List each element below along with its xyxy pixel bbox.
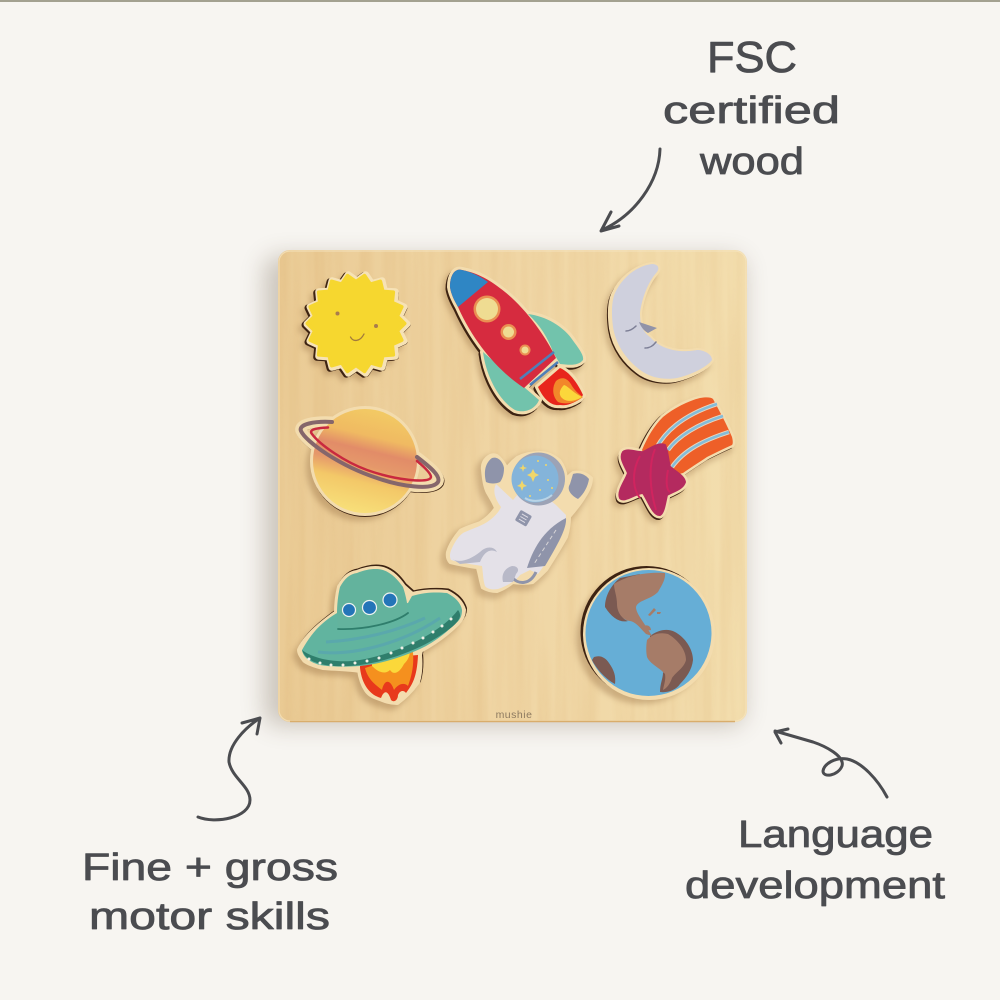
piece: shooting star (615, 397, 733, 520)
top border strip (0, 0, 1000, 2)
backpack stitching (534, 530, 556, 564)
label text: certified (663, 90, 840, 132)
rim lights (308, 618, 452, 666)
astronaut knee shading (451, 548, 518, 582)
piece: ringed planet (301, 406, 439, 521)
piece: rocket (446, 270, 583, 416)
rocket flame (538, 368, 583, 405)
label text: wood (699, 141, 804, 183)
piece: astronaut (444, 452, 592, 596)
piece: crescent moon (607, 264, 712, 385)
label text: FSC (707, 33, 797, 82)
saucer windows (342, 593, 397, 616)
arrow to board (601, 149, 660, 231)
continent shading (592, 574, 693, 692)
star tail (642, 397, 733, 480)
astronaut chest panel (515, 510, 532, 527)
piece: earth (576, 566, 715, 704)
label text: development (685, 865, 946, 907)
rocket body (450, 270, 556, 388)
planet ball (313, 409, 417, 513)
moon face (626, 322, 657, 348)
wooden puzzle board (278, 250, 747, 722)
tail stripe centres (657, 404, 729, 467)
star (619, 444, 685, 515)
astronaut tether (512, 572, 536, 582)
star arcs (634, 449, 670, 510)
planet ring (301, 422, 438, 487)
saucer rim (302, 610, 460, 666)
sun face (336, 312, 378, 340)
saucer flame (360, 650, 418, 701)
label text (82, 847, 338, 938)
callout: language development (685, 729, 946, 907)
planet wood edge (301, 406, 438, 516)
astronaut gloves (485, 458, 589, 499)
arrow to board (775, 729, 887, 797)
label text (685, 814, 946, 907)
tail stripes (657, 404, 729, 467)
callout: FSC certified wood (601, 33, 840, 231)
rocket nose (450, 270, 488, 307)
astronaut backpack (527, 518, 566, 568)
saucer dome (337, 569, 408, 630)
callout: fine and gross motor skills (82, 718, 338, 938)
board shadow (264, 256, 744, 726)
label text: Fine + gross (82, 847, 338, 889)
earth ocean (586, 570, 712, 696)
label text (663, 33, 840, 183)
brand mark: mushie (496, 709, 532, 721)
rocket windows (474, 296, 530, 356)
rocket fins (483, 314, 583, 411)
saucer blue bands (318, 618, 440, 653)
label text: motor skills (89, 896, 330, 938)
rocket stripes (520, 352, 558, 385)
label text: Language (738, 814, 933, 856)
piece: flying saucer (296, 568, 464, 707)
continents (614, 573, 686, 690)
piece: sun (302, 275, 408, 378)
arrow to board (198, 718, 260, 820)
saucer disc (302, 592, 462, 667)
astronaut suit (450, 482, 566, 589)
dome base line (338, 613, 408, 629)
astronaut helmet (512, 452, 565, 506)
planet edge shadow (301, 409, 439, 517)
